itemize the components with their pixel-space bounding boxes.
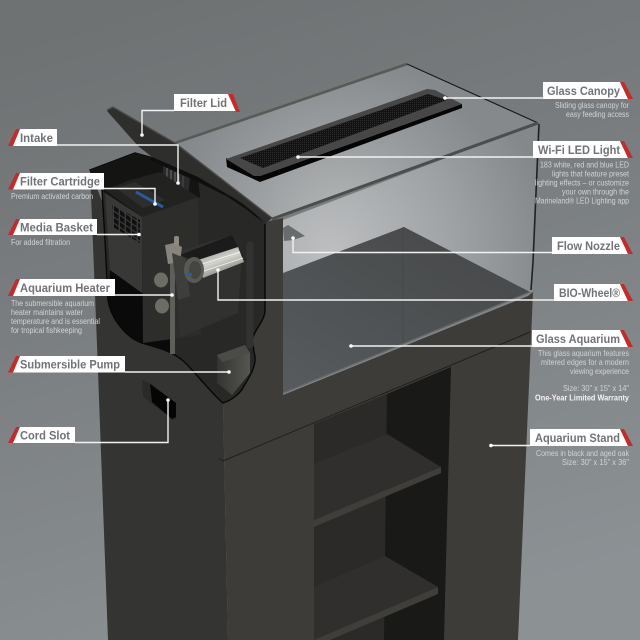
return tube	[246, 245, 254, 345]
label: Glass Canopy	[443, 82, 633, 119]
label: Cord Slot	[8, 398, 170, 443]
label: Aquarium Heater: Aquarium Heater	[20, 283, 111, 295]
glass right edge	[531, 124, 539, 290]
label: Aquarium Stand	[489, 429, 633, 467]
label: Flow Nozzle	[291, 236, 633, 254]
stand front face	[223, 218, 533, 640]
cord slot	[142, 380, 176, 420]
label: Filter Lid: Filter Lid	[180, 98, 227, 110]
label: BIO-Wheel	[216, 268, 633, 301]
label: Glass Aquarium	[349, 330, 633, 402]
rear wall	[90, 153, 200, 217]
label: Wi-Fi LED Light	[296, 141, 633, 206]
label: Wi-Fi LED Light: Wi-Fi LED Light	[538, 145, 620, 157]
label: Intake	[8, 129, 180, 185]
canopy right edge	[407, 64, 538, 123]
floor rim	[283, 292, 530, 393]
intake grille	[163, 165, 190, 198]
glass back wall	[283, 123, 538, 292]
flow nozzle	[283, 225, 305, 241]
aquarium floor	[283, 227, 530, 393]
label: Glass Aquarium: Glass Aquarium	[536, 334, 620, 346]
label: Filter Lid	[140, 94, 240, 137]
lower dark cavity	[108, 270, 172, 353]
label: Submersible Pump	[8, 356, 231, 374]
label: Aquarium Stand: Size: 30" x 15" x 36"	[562, 457, 629, 467]
label: Flow Nozzle: Flow Nozzle	[557, 241, 620, 253]
label: Aquarium Heater: temperature and is essential	[11, 316, 100, 326]
filter chamber	[90, 107, 272, 403]
stand groove	[219, 332, 530, 461]
stand side face	[90, 170, 228, 640]
label: Glass Aquarium: Size: 30" x 15" x 14"	[563, 383, 629, 393]
submersible pump	[217, 345, 250, 395]
label: Intake: Intake	[20, 133, 53, 145]
stand shelf opening	[314, 367, 451, 640]
label: BIO-Wheel: BIO-Wheel®	[559, 288, 620, 300]
upper shelf	[314, 434, 441, 527]
bio wheel	[184, 247, 244, 283]
label: Media Basket: For added filtration	[11, 237, 70, 247]
canopy front bar	[272, 123, 538, 219]
label: Aquarium Heater	[8, 279, 174, 335]
glass canopy	[175, 64, 538, 218]
label: Aquarium Heater: for tropical fishkeeping	[11, 325, 82, 335]
label: Media Basket: Media Basket	[20, 222, 93, 234]
aquarium illustration	[90, 64, 539, 640]
filter cartridge	[116, 182, 165, 208]
label: Aquarium Heater: heater maintains water	[11, 307, 83, 317]
floor seam	[402, 227, 404, 343]
label: Aquarium Stand: Aquarium Stand	[535, 433, 620, 445]
label: Media Basket	[8, 219, 141, 247]
label: Filter Cartridge	[8, 173, 157, 206]
media basket box	[105, 172, 201, 343]
label: Cord Slot: Cord Slot	[20, 430, 70, 442]
lower shelf	[314, 556, 438, 640]
filter lid	[107, 107, 272, 224]
label: Glass Canopy: Glass Canopy	[547, 86, 621, 98]
filter knobs	[154, 236, 179, 314]
filter body	[165, 235, 243, 354]
label: Filter Cartridge: Filter Cartridge	[20, 176, 100, 188]
canopy back bar	[175, 64, 407, 143]
label: Submersible Pump: Submersible Pump	[20, 360, 120, 372]
label: Filter Cartridge: Premium activated carbon	[11, 191, 93, 201]
wifi led light	[226, 89, 462, 182]
label: Aquarium Heater: The submersible aquarium	[11, 298, 94, 308]
